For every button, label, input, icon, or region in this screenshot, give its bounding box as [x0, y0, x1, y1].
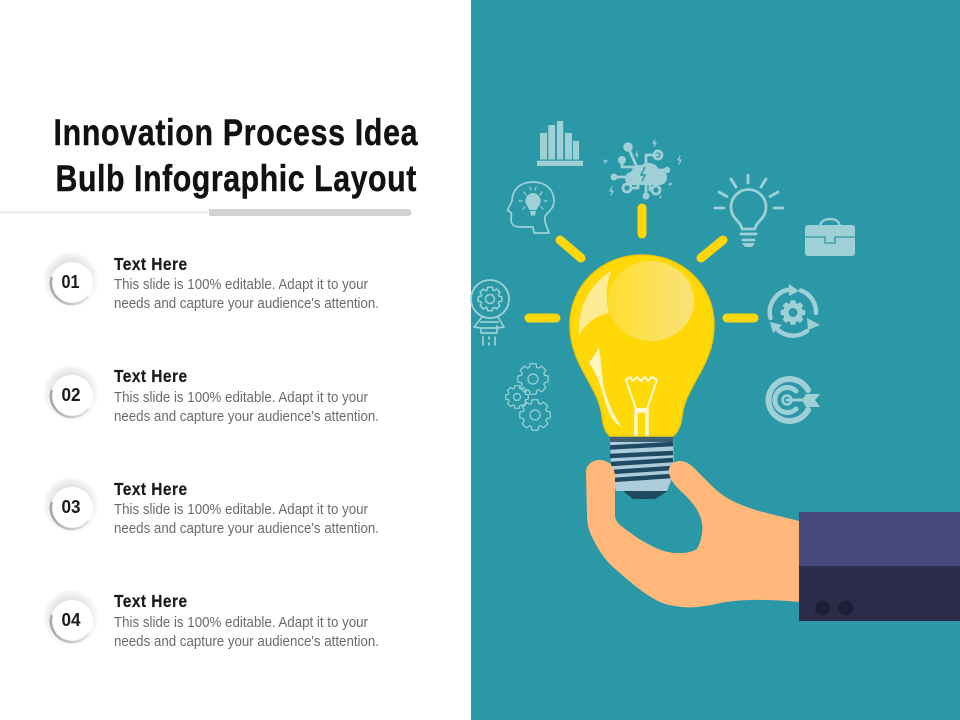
- list item 02: [44, 366, 379, 425]
- title: [54, 112, 419, 200]
- list item 04: [44, 590, 379, 650]
- bulb lower reflection: [589, 348, 622, 427]
- number badge 02: [44, 366, 99, 420]
- number badge 01: 01: [62, 271, 80, 292]
- body text 04: This slide is 100% editable. Adapt it to your: [114, 614, 368, 631]
- background: white left side: [0, 0, 471, 720]
- number badge 04: 04: [62, 609, 81, 630]
- bulb highlight: [608, 261, 694, 341]
- number badge 04: [44, 590, 99, 646]
- body text 04: needs and capture your audience's attention.: [114, 633, 379, 650]
- body text 02: [114, 389, 379, 425]
- heading 04: Text Here: [114, 591, 187, 611]
- icon: gear with cycle arrows: [770, 284, 820, 336]
- icon: head with idea bulb: [508, 182, 554, 233]
- icon: outline light bulb with rays: [715, 175, 783, 247]
- icon: circuit cloud with lightning: [604, 140, 681, 200]
- light bulb: [570, 255, 714, 499]
- screw base: [610, 437, 674, 499]
- icon: briefcase: [805, 219, 855, 256]
- body text 01: [114, 276, 379, 312]
- list item 01: [44, 252, 379, 312]
- body text 02: needs and capture your audience's attention.: [114, 408, 379, 425]
- title: Innovation Process Idea: [54, 112, 419, 154]
- body text 04: [114, 614, 379, 650]
- body text 03: [114, 501, 379, 537]
- panel: teal illustration background: [471, 0, 960, 720]
- bulb glass: [570, 255, 714, 436]
- hand: [586, 460, 799, 607]
- suit sleeve: [799, 512, 960, 621]
- icon: target with arrow: [769, 379, 820, 421]
- rays around bulb: [529, 208, 754, 318]
- number badge 03: 03: [62, 496, 80, 517]
- body text 02: This slide is 100% editable. Adapt it to your: [114, 389, 368, 406]
- title underline: [0, 209, 412, 216]
- body text 03: This slide is 100% editable. Adapt it to your: [114, 501, 368, 518]
- heading 02: Text Here: [114, 366, 187, 386]
- icon: three gears: [506, 364, 550, 430]
- title: Bulb Infographic Layout: [56, 158, 416, 200]
- body text 01: This slide is 100% editable. Adapt it to your: [114, 276, 368, 293]
- list item 03: [44, 478, 379, 537]
- body text 03: needs and capture your audience's attention.: [114, 520, 379, 537]
- body text 01: needs and capture your audience's attention.: [114, 295, 379, 312]
- icon: bar chart: [537, 121, 583, 166]
- heading 01: Text Here: [114, 254, 187, 274]
- icon: bulb with gear and rocket base: [471, 280, 509, 345]
- bulb left reflection: [579, 270, 612, 336]
- number badge 03: [44, 478, 99, 532]
- number badge 02: 02: [62, 384, 80, 405]
- cuff buttons: [815, 600, 853, 616]
- heading 03: Text Here: [114, 479, 187, 499]
- number badge 01: [44, 252, 99, 308]
- filament: [626, 377, 657, 436]
